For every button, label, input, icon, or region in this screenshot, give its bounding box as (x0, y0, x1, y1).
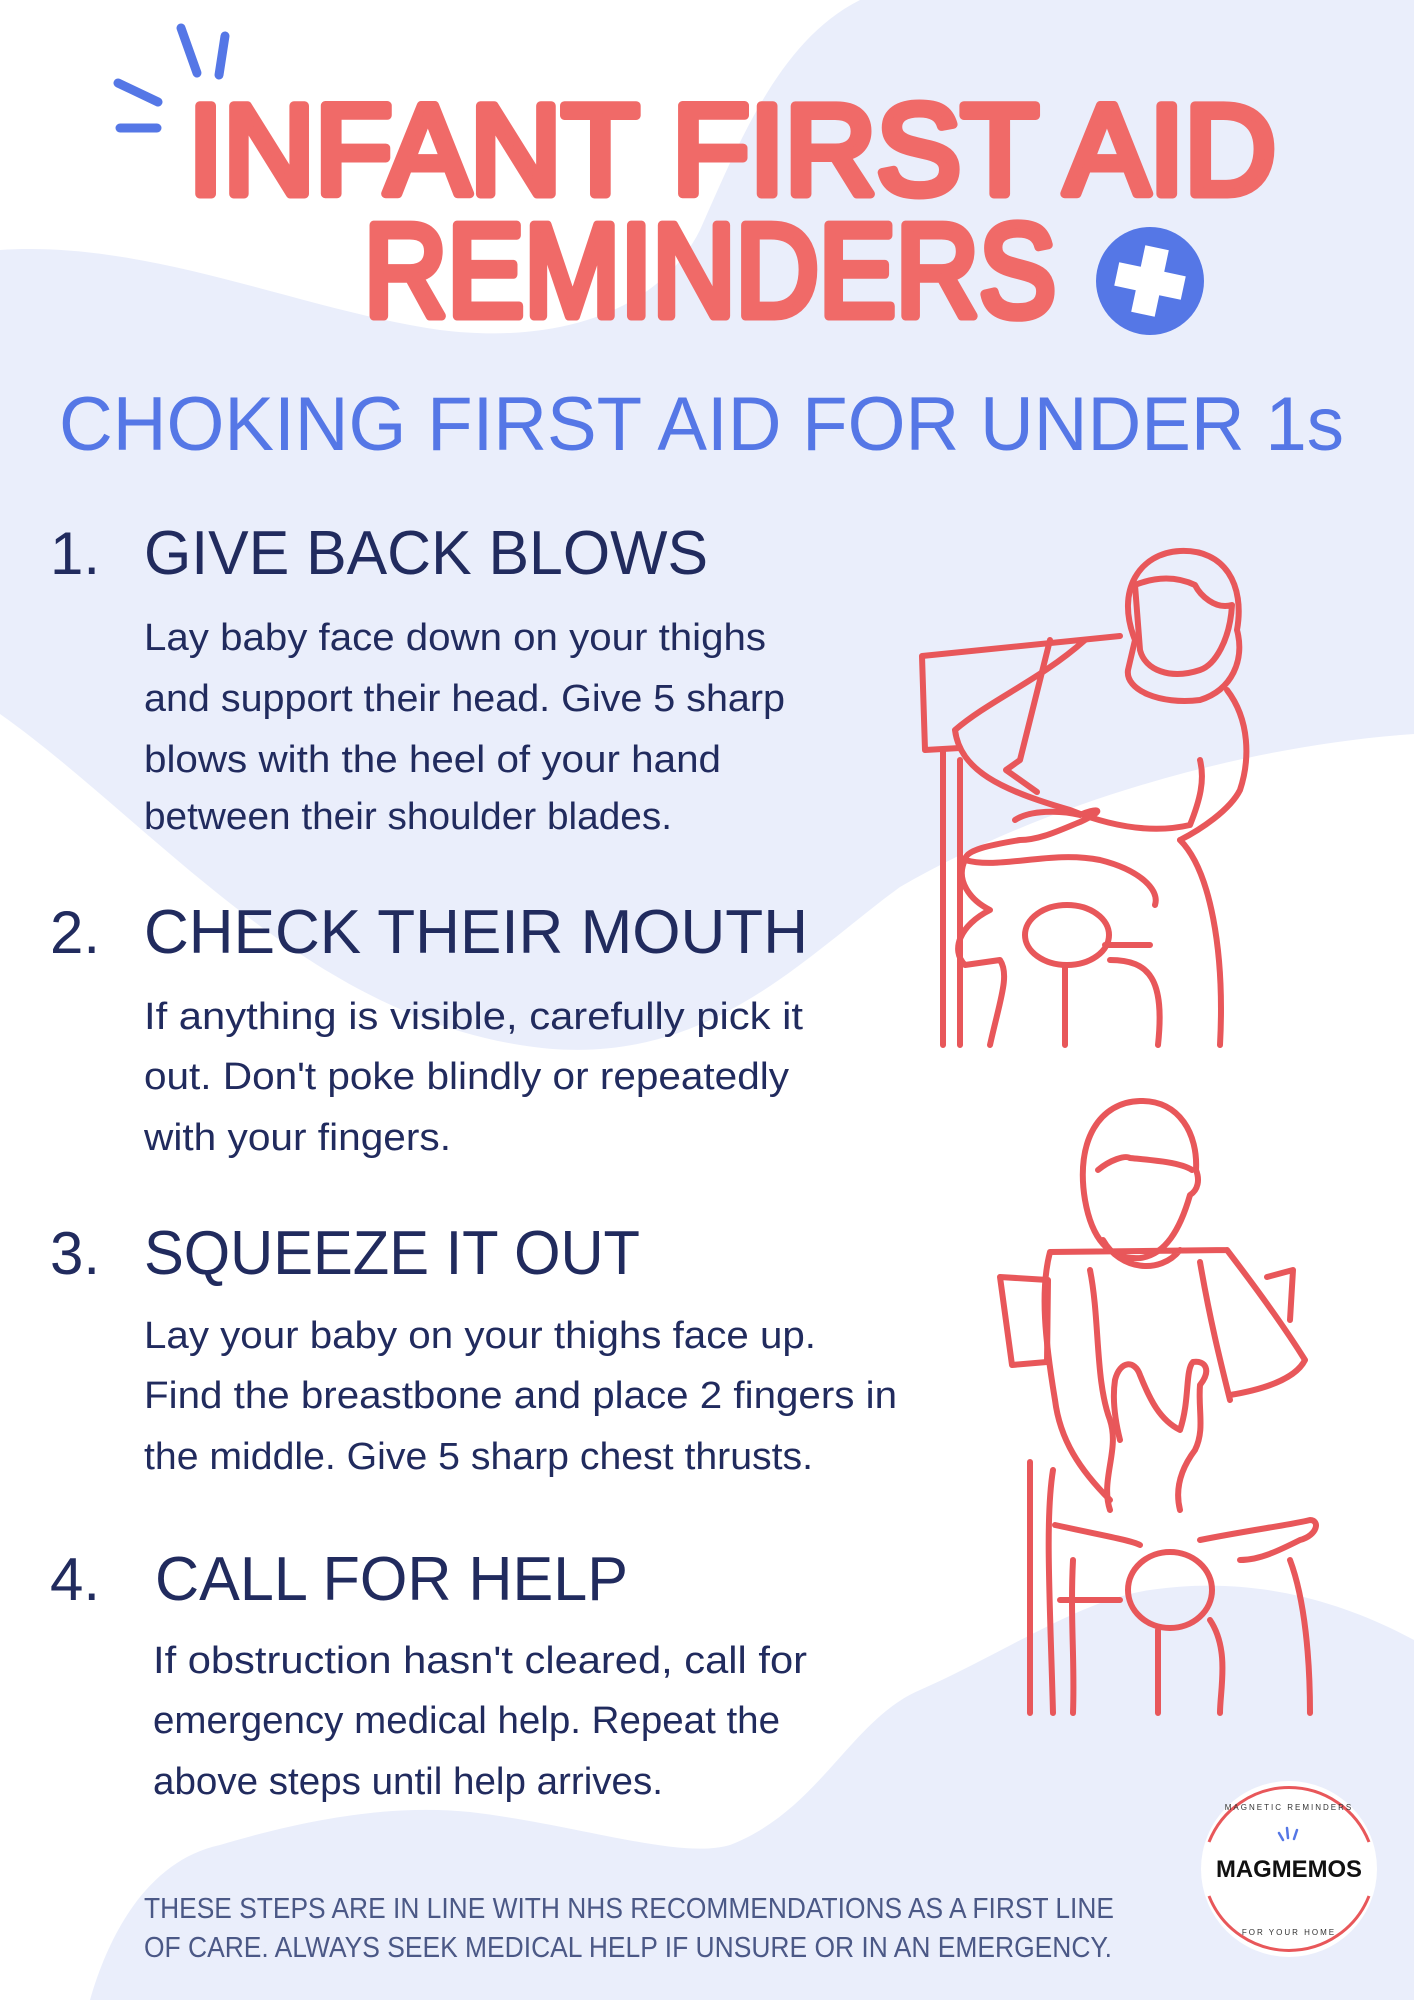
footer note (144, 1893, 1114, 1964)
logo: magmemos: MAGNETIC REMINDERS (1225, 1803, 1353, 1812)
step 2: 2. (50, 899, 100, 966)
step 1: blows with the heel of your hand (144, 739, 721, 781)
illustration: chest thrusts (1000, 1101, 1316, 1713)
step 4: CALL FOR HELP (155, 1545, 628, 1614)
step 2 (50, 898, 808, 1159)
title (188, 79, 1276, 344)
step 1: and support their head. Give 5 sharp (144, 678, 785, 720)
step 1: GIVE BACK BLOWS (144, 519, 708, 588)
step 2: CHECK THEIR MOUTH (144, 898, 808, 967)
logo: magmemos: MAGMEMOS (1216, 1856, 1362, 1883)
logo: magmemos (1201, 1781, 1377, 1957)
step 2: out. Don't poke blindly or repeatedly (144, 1056, 789, 1098)
footer note: THESE STEPS ARE IN LINE WITH NHS RECOMMENDATIONS AS A FIRST LINE (144, 1893, 1114, 1925)
logo: magmemos: FOR YOUR HOME (1242, 1928, 1336, 1937)
step 3: Lay your baby on your thighs face up. (144, 1315, 816, 1357)
step 1: 1. (50, 520, 100, 587)
step 1: Lay baby face down on your thighs (144, 617, 766, 659)
step 3: SQUEEZE IT OUT (144, 1219, 640, 1288)
step 3: Find the breastbone and place 2 fingers in (144, 1375, 897, 1417)
icon: plus circle (1096, 227, 1204, 335)
step 1 (50, 519, 785, 838)
step 4: 4. (50, 1546, 100, 1613)
step 4: emergency medical help. Repeat the (153, 1700, 780, 1742)
step 4: If obstruction hasn't cleared, call for (153, 1640, 807, 1682)
step 3 (50, 1219, 897, 1478)
step 2: If anything is visible, carefully pick it (144, 996, 803, 1038)
footer note: OF CARE. ALWAYS SEEK MEDICAL HELP IF UNSURE OR IN AN EMERGENCY. (144, 1932, 1112, 1964)
step 4: above steps until help arrives. (153, 1761, 663, 1803)
icon: sparkle lines (118, 28, 225, 128)
subtitle: CHOKING FIRST AID FOR UNDER 1s (59, 382, 1344, 467)
title: REMINDERS (364, 197, 1056, 344)
step 3: 3. (50, 1220, 100, 1287)
step 3: the middle. Give 5 sharp chest thrusts. (144, 1436, 813, 1478)
illustration: back blows (922, 551, 1246, 1045)
step 1: between their shoulder blades. (144, 796, 672, 838)
title: INFANT FIRST AID (188, 79, 1276, 222)
step 2: with your fingers. (143, 1117, 451, 1159)
step 4 (50, 1545, 807, 1803)
